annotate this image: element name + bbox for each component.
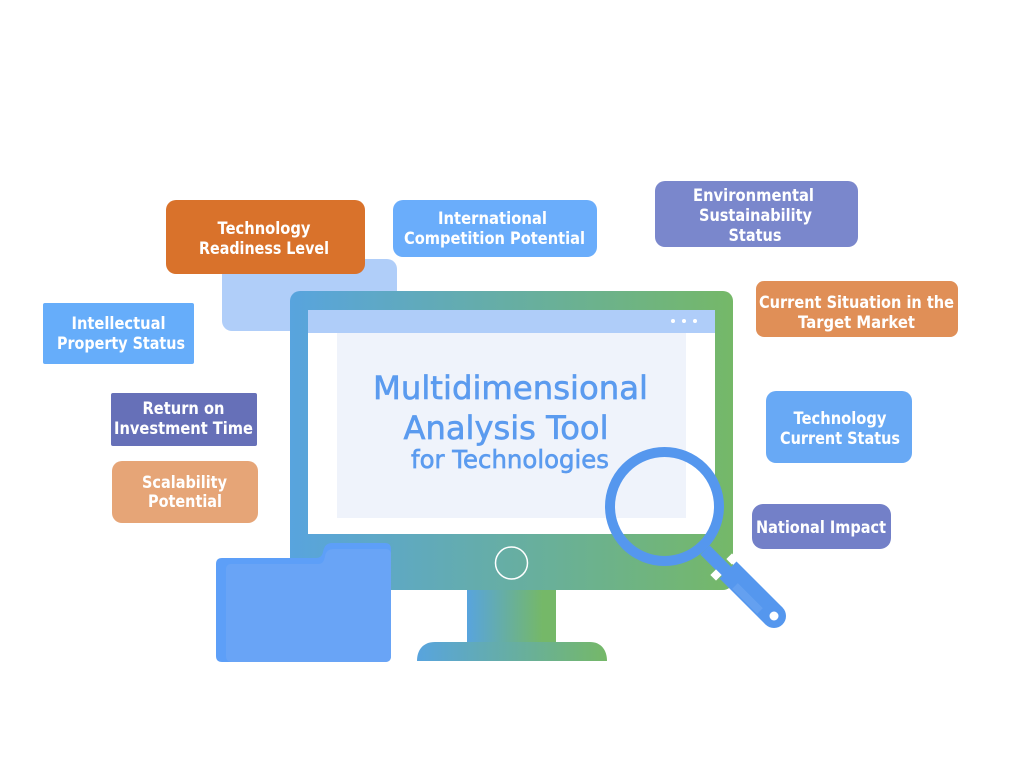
label: Intellectual Property Status: Intellectual [72, 314, 166, 333]
label: International Competition Potential: International [438, 209, 547, 228]
label: Scalability Potential: Scalability [142, 473, 227, 492]
label: National Impact: National Impact [756, 518, 886, 537]
label: Return on Investment Time [111, 393, 257, 446]
power button [496, 547, 528, 579]
label: Environmental Sustainability Status: Environmental [693, 186, 814, 205]
title: for Technologies [411, 445, 609, 474]
screen title bar [308, 310, 715, 333]
monitor screen [308, 310, 715, 534]
title: Analysis Tool [404, 409, 608, 447]
label: Return on Investment Time: Return on [142, 399, 224, 418]
label: Return on Investment Time: Investment Time [114, 419, 253, 438]
label: Intellectual Property Status [43, 303, 194, 364]
monitor [290, 291, 733, 661]
label: Technology Readiness Level: Readiness Level [199, 239, 329, 258]
label: Technology Readiness Level: Technology [218, 219, 311, 238]
icon: folder [216, 543, 391, 662]
label: Scalability Potential: Potential [148, 492, 222, 511]
label: Current Situation in the Target Market: Target Market [798, 313, 915, 332]
label: Technology Current Status: Current Status [780, 429, 900, 448]
label: Technology Current Status [766, 391, 912, 463]
screen content panel [337, 333, 686, 518]
title: Multidimensional [373, 369, 648, 407]
label: Current Situation in the Target Market [756, 281, 958, 337]
label: Technology Readiness Level [166, 200, 365, 274]
label: Environmental Sustainability Status: Sustainability [699, 206, 812, 225]
label: Environmental Sustainability Status [655, 181, 858, 247]
icon: magnifying glass [610, 452, 786, 628]
label: International Competition Potential: Competition Potential [404, 229, 585, 248]
title [373, 369, 648, 474]
back panel behind monitor [222, 259, 397, 331]
label: Current Situation in the Target Market: Current Situation in the [759, 293, 954, 312]
monitor frame [290, 291, 733, 590]
label: National Impact [752, 504, 891, 549]
label: International Competition Potential [393, 200, 597, 257]
monitor stand [417, 588, 607, 661]
label: Technology Current Status: Technology [794, 409, 887, 428]
label: Environmental Sustainability Status: Status [728, 226, 782, 245]
window dots [671, 319, 697, 323]
label: Scalability Potential [112, 461, 258, 523]
label: Intellectual Property Status: Property Status [57, 334, 185, 353]
